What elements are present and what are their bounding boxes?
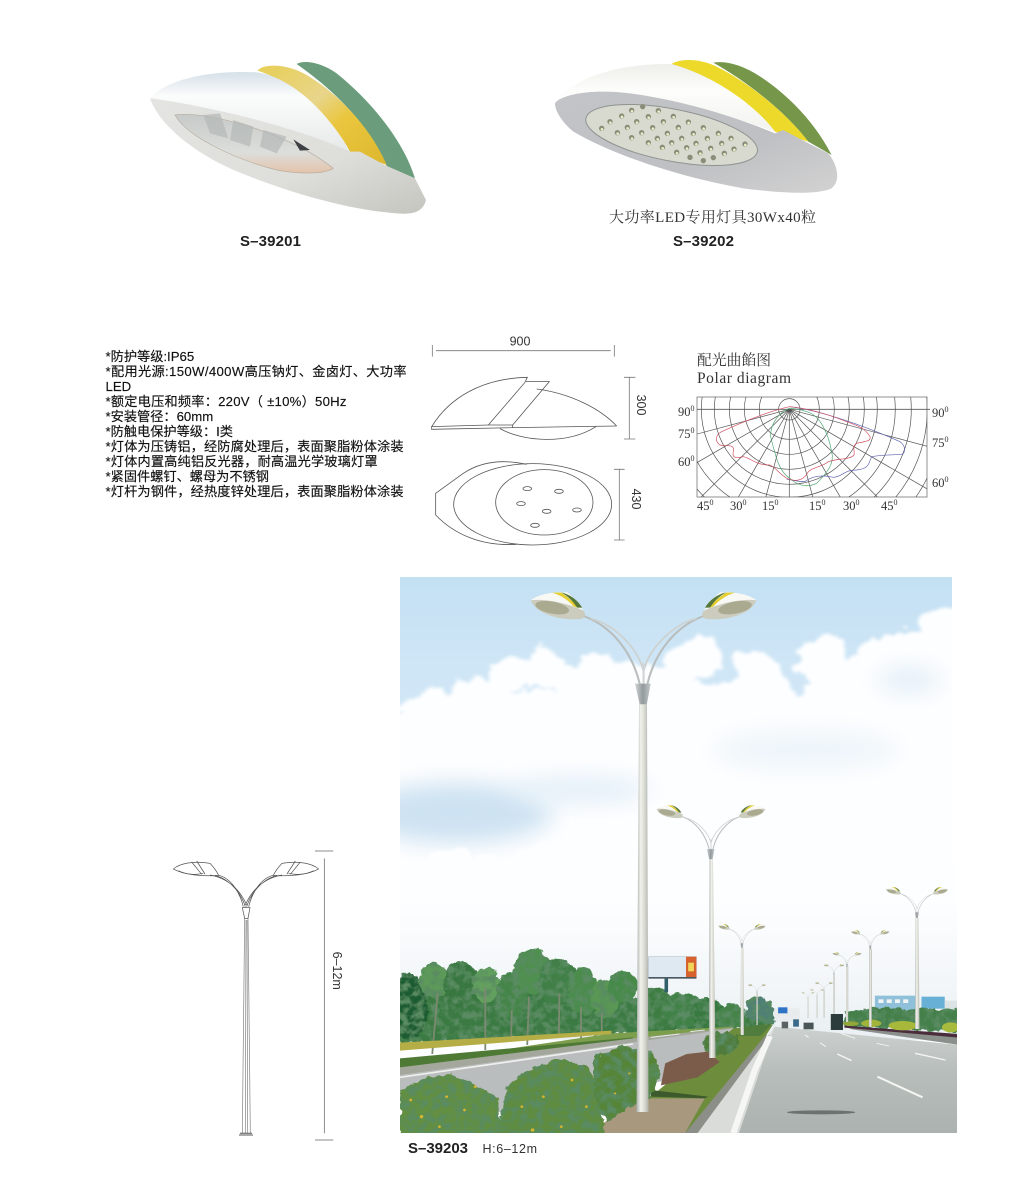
vehicles xyxy=(782,1014,843,1030)
street scene photo with double-arm lamps xyxy=(400,577,957,1133)
specification text block: *防触电保护等级：I类 xyxy=(106,423,233,439)
specification text block: *防护等级:IP65 xyxy=(106,348,194,364)
specification text block: *紧固件螺钉、螺母为不锈钢 xyxy=(106,469,269,484)
dimension drawing: fixture side and top views xyxy=(432,334,648,545)
polar light distribution chart: 75 xyxy=(678,427,690,441)
specification text block: *灯杆为钢件，经热度锌处理后，表面聚脂粉体涂装 xyxy=(106,484,404,499)
right road surface xyxy=(739,1027,959,1133)
polar light distribution chart: 0 xyxy=(710,498,714,507)
polar diagram title: Polar diagram xyxy=(697,370,791,387)
specification text block: *配用光源:150W/400W高压钠灯、金卤灯、大功率 xyxy=(106,363,406,379)
specification text block: *安装管径：60mm xyxy=(106,409,213,424)
horizon haze xyxy=(400,965,957,1040)
polar light distribution chart: 45 xyxy=(697,499,710,513)
polar light distribution chart: 45 xyxy=(881,499,894,513)
product photo: LED lamp S-39202 xyxy=(555,60,837,193)
dimension drawing: fixture side and top views: 430 xyxy=(629,489,643,509)
polar light distribution chart: 0 xyxy=(774,498,778,507)
caption: LED fixture note: 大功率LED专用灯具30Wx40粒 xyxy=(609,209,816,226)
curb and concrete strip xyxy=(685,1027,775,1133)
polar light distribution chart: 15 xyxy=(762,499,774,513)
lamp pole 4 xyxy=(748,984,766,1025)
polar light distribution chart: 15 xyxy=(809,499,822,513)
lamp pole 7 xyxy=(832,952,862,1022)
road stain xyxy=(787,1110,855,1114)
median ground xyxy=(590,1023,773,1133)
polar light distribution chart: 0 xyxy=(822,498,826,507)
polar light distribution chart: 0 xyxy=(690,454,694,463)
polar light distribution chart: 75 xyxy=(932,436,944,450)
lamp pole 2 xyxy=(657,805,765,1058)
line drawing: double-arm pole with height dimension xyxy=(173,851,344,1140)
left road xyxy=(400,1028,733,1113)
polar light distribution chart: 30 xyxy=(843,499,856,513)
polar light distribution chart xyxy=(678,396,948,510)
specification text block: *额定电压和频率：220V（ ±10%）50Hz xyxy=(106,393,346,409)
label: S-39202: S–39202 xyxy=(673,233,734,250)
far tree lines xyxy=(746,997,959,1032)
ground scene xyxy=(391,949,960,1140)
product photo: lamp S-39201 xyxy=(150,62,426,214)
specification text block: *灯体内置高纯铝反光器，耐高温光学玻璃灯罩 xyxy=(106,453,378,469)
lamp pole 10 xyxy=(810,989,824,1018)
foreground bushes xyxy=(400,1032,739,1140)
polar light distribution chart: 60 xyxy=(678,455,690,469)
polar light distribution chart: 90 xyxy=(932,406,944,420)
lamp pole 8 xyxy=(824,964,844,1014)
dimension drawing: fixture side and top views: 900 xyxy=(510,334,530,348)
road dashes and markings xyxy=(805,1033,945,1097)
label: S-39203 and height xyxy=(408,1140,537,1157)
lamp pole 5 xyxy=(886,887,948,1029)
specification text block xyxy=(106,348,406,499)
left verge with hedges xyxy=(400,1027,733,1076)
specification text block: LED xyxy=(106,379,131,394)
billboard xyxy=(648,957,696,992)
tree trunks xyxy=(432,987,602,1054)
sky xyxy=(400,577,952,715)
polar light distribution chart: 0 xyxy=(690,404,694,413)
bush flowers xyxy=(409,1072,630,1132)
polar light distribution chart: 0 xyxy=(944,435,948,444)
lamp pole 3 xyxy=(718,924,766,1035)
line drawing: double-arm pole with height dimension: 6–12m xyxy=(330,952,344,990)
dimension drawing: fixture side and top views: 300 xyxy=(634,395,648,415)
specification text block: *灯体为压铸铝，经防腐处理后，表面聚脂粉体涂装 xyxy=(106,439,404,454)
polar diagram title: 配光曲餡图 xyxy=(697,352,771,369)
lamp pole 1: foreground xyxy=(531,592,756,1112)
polar diagram title xyxy=(697,352,791,387)
polar light distribution chart: 0 xyxy=(742,498,746,507)
label: S-39203 and height: S–39203 xyxy=(408,1140,468,1157)
roadside trees xyxy=(391,949,773,1043)
polar light distribution chart: 0 xyxy=(894,498,898,507)
distant buildings and sign xyxy=(773,996,959,1022)
polar light distribution chart: 0 xyxy=(944,405,948,414)
polar light distribution chart: 0 xyxy=(690,426,694,435)
label: S-39201: S–39201 xyxy=(240,233,301,250)
lamp pole 6 xyxy=(851,930,890,1027)
clouds xyxy=(400,606,957,1001)
polar light distribution chart: 30 xyxy=(730,499,742,513)
label: S-39203 and height: H:6–12m xyxy=(482,1142,537,1156)
right median and hedges xyxy=(843,1020,960,1045)
polar light distribution chart: 0 xyxy=(856,498,860,507)
polar light distribution chart: 0 xyxy=(944,475,948,484)
lamp pole 9 xyxy=(815,982,833,1018)
polar light distribution chart: 90 xyxy=(678,405,690,419)
polar light distribution chart: 60 xyxy=(932,476,944,490)
lamp pole 11 xyxy=(802,992,814,1018)
